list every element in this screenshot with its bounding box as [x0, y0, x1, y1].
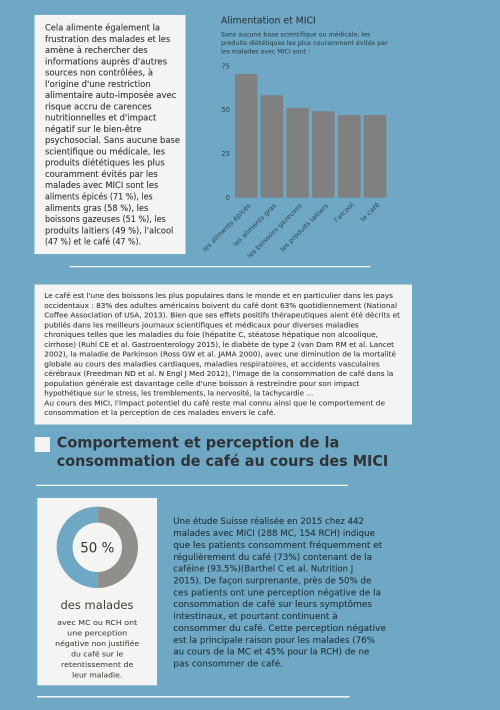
icon: heading square: [35, 437, 50, 452]
section heading: consommation de café au cours des MICI: [57, 452, 388, 470]
panel: coffee introduction: [34, 284, 412, 424]
panel: coffee introduction: cérébraux (Freedman ND et al. N Engl J Med 2012), l'image de la consommation de café dans la: [44, 369, 393, 378]
y axis labels: 0: [226, 194, 230, 202]
text block: Swiss study: consommer du café. Cette perception négative: [173, 623, 386, 634]
stat label: des malades: [60, 598, 134, 612]
stat description: retentissement de: [61, 660, 134, 669]
panel: left text on diet: produits laitiers (49 %), l'alcool: [45, 226, 173, 236]
panel: left text on diet: nutritionnelles et d'impact: [45, 114, 157, 124]
panel: left text on diet: informations auprès d'autres: [45, 56, 168, 67]
stat description: leur maladie.: [72, 670, 122, 680]
stat description: avec MC ou RCH ont: [57, 618, 137, 627]
chart heading: Alimentation et MICI: Alimentation et MICI: [221, 15, 316, 26]
section heading: Comportement et perception de la: [57, 434, 339, 452]
panel: coffee introduction: Coffee Association of USA, 2013). Bien que ses effets positifs thérapeutiques aient été décrits et: [44, 311, 400, 320]
panel: left text on diet: psychosocial. Sans aucune base: [45, 136, 180, 146]
chart description: [221, 31, 388, 56]
x axis labels: les aliments gras: [232, 201, 279, 248]
panel: left text on diet: risque accru de carences: [45, 102, 152, 112]
panel: left text on diet: malades avec MICI sont les: [45, 181, 159, 191]
panel: coffee introduction: Le café est l'une des boissons les plus populaires dans le monde et en particulier dans les pays: [44, 291, 393, 300]
text block: Swiss study: régulièrement du café (73%) contenant de la: [173, 552, 372, 563]
text block: Swiss study: au cours de la MC et 45% pour la RCH) de ne: [173, 648, 369, 658]
panel: coffee introduction: cirrhose) (Ruhl CE et al. Gastroenterology 2015), le diabète de type 2 (van Dam RM et al. Lancet: [44, 340, 394, 349]
panel: left text on diet: aliments gras (58 %), les: [45, 204, 149, 214]
panel: left text on diet: amène à rechercher des: [45, 45, 148, 56]
x axis labels: les aliments épicés: [201, 201, 253, 253]
panel: coffee introduction: Au cours des MICI, l'impact potentiel du café reste mal connu ainsi que le comportement de: [44, 398, 386, 408]
panel: 50% statistic: [37, 498, 157, 685]
x axis labels: [201, 201, 381, 260]
text block: Swiss study: ces patients ont une perception négative de la: [173, 587, 381, 598]
panel: left text on diet: frustration des malades et les: [45, 35, 171, 45]
panel: coffee introduction: population générale est davantage celle d'une boisson à restreindre pour son impact: [44, 379, 359, 388]
panel: coffee introduction: globale au cours des maladies cardiaques, maladies respiratoires, et accidents vasculaires: [44, 360, 380, 368]
text block: Swiss study: 2015). De façon surprenante, près de 50% de: [173, 576, 371, 586]
panel: coffee introduction: publiés dans les meilleurs journaux scientifiques et médicaux pour diverses maladies: [44, 320, 359, 330]
panel: left text on diet: scientifique ou médicale, les: [45, 146, 166, 158]
text block: Swiss study: malades avec MICI (288 MC, 154 RCH) indique: [173, 529, 375, 539]
text block: Swiss study: que les patients consomment fréquemment et: [173, 540, 383, 551]
x axis labels: le café: [359, 201, 381, 223]
panel: left text on diet: [34, 15, 186, 254]
text block: Swiss study: consommation de café sur leurs symptômes: [173, 599, 372, 610]
text block: Swiss study: est la principale raison pour les malades (76%: [173, 636, 375, 646]
panel: left text on diet: alimentaire auto-imposée avec: [45, 90, 177, 101]
donut value: 50 %: [80, 541, 114, 557]
x axis labels: l'alcool: [332, 201, 356, 224]
chart description: Sans aucune base scientifique ou médicale, les: [221, 31, 371, 39]
section heading: [57, 434, 388, 470]
panel: left text on diet: boissons gazeuses (51 %), les: [45, 215, 166, 225]
text block: Swiss study: Une étude Suisse réalisée en 2015 chez 442: [173, 516, 364, 527]
panel: coffee introduction: consommation et la perception de ces malades envers le café.: [44, 408, 276, 417]
chart description: les malades avec MICI sont :: [221, 48, 310, 56]
text block: Swiss study: pas consommer de café.: [173, 658, 283, 670]
stat description: du café sur le: [71, 650, 124, 658]
x axis labels: les produits laitiers: [278, 201, 331, 253]
bar chart: avoided foods: [201, 62, 386, 260]
bars: [235, 74, 386, 198]
y axis labels: 25: [221, 150, 230, 158]
panel: coffee introduction: chroniques telles que les maladies du foie (hépatite C, stéatose hépatique non alcoolique,: [44, 330, 378, 339]
stat description: négative non justifiée: [55, 639, 140, 648]
text block: Swiss study: [173, 516, 386, 670]
stat description: [55, 618, 140, 680]
y axis labels: 50: [221, 106, 230, 114]
panel: left text on diet: produits diététiques les plus: [45, 158, 165, 169]
panel: left text on diet: (47 %) et le café (47 %).: [45, 236, 141, 248]
panel: left text on diet: aliments épicés (71 %), les: [45, 192, 153, 202]
chart description: produits diététiques les plus couramment évités par: [221, 39, 388, 47]
panel: left text on diet: négatif sur le bien-être: [45, 124, 142, 135]
panel: left text on diet: Cela alimente également la: [45, 23, 160, 34]
panel: left text on diet: sources non contrôlées, à: [45, 68, 153, 79]
text block: Swiss study: intestinaux, et pourtant continuent à: [173, 612, 338, 622]
y axis labels: [221, 62, 230, 202]
panel: coffee introduction: 2002), la maladie de Parkinson (Ross GW et al. JAMA 2000), avec une diminution de la mortalité: [44, 350, 397, 359]
stat description: une perception: [67, 628, 128, 638]
donut chart: [57, 507, 138, 588]
y axis labels: 75: [221, 62, 230, 70]
panel: coffee introduction: occidentaux : 83% des adultes américains boivent du café dont 63% quotidiennement (National: [44, 301, 397, 310]
x axis labels: les boissons gazeuses: [246, 201, 304, 260]
panel: left text on diet: couramment évités par les: [45, 169, 158, 180]
panel: coffee introduction: hypothétique sur le stress, les tremblements, la nervosité, la tachycardie …: [44, 389, 313, 398]
text block: Swiss study: caféine (93.5%)(Barthel C et al. Nutrition J: [173, 564, 353, 575]
panel: left text on diet: l'origine d'une restriction: [45, 80, 151, 90]
